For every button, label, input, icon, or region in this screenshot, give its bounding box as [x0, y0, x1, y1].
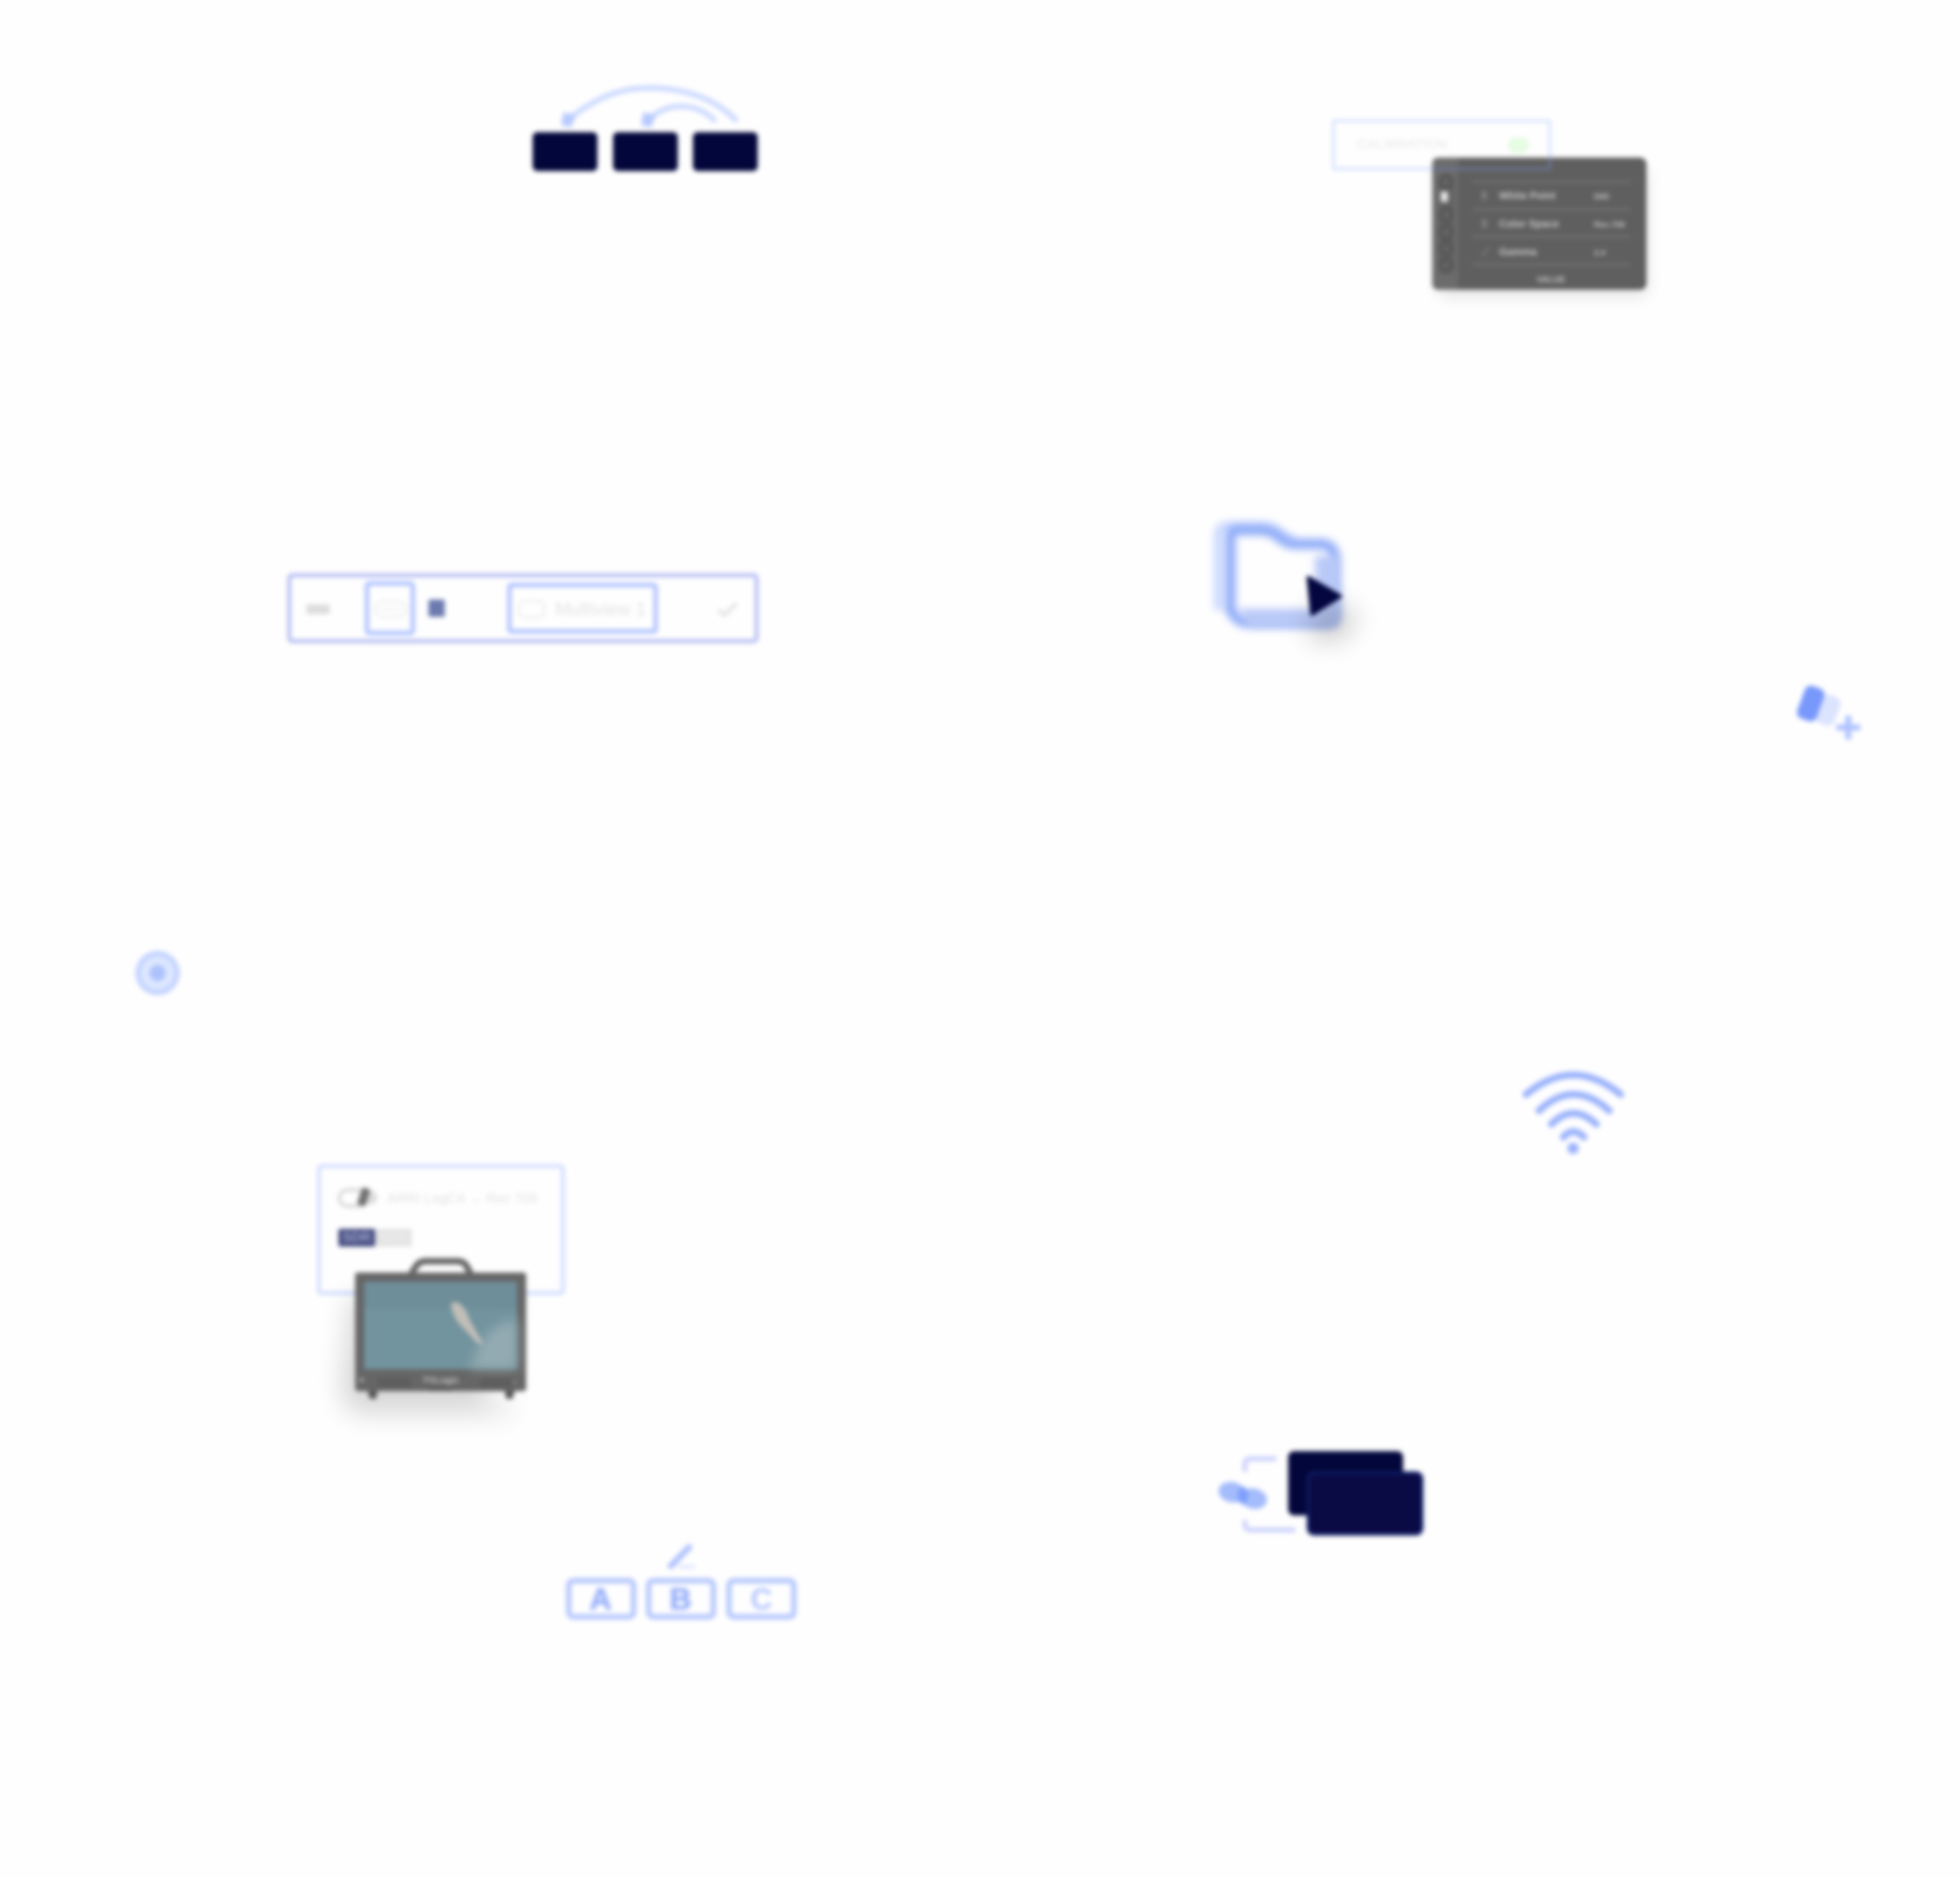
menu rows text: Rec.709 [1594, 220, 1625, 229]
toolbar frame [289, 575, 757, 641]
menu shadow [1438, 167, 1648, 297]
preset C [729, 1581, 794, 1617]
conversion label: ARRI LogC4 → Rec 709 [387, 1191, 537, 1206]
icon: folder with play [1219, 526, 1360, 642]
icon: A B C presets with pencil: A [590, 1582, 611, 1616]
bracket [1245, 1459, 1295, 1530]
boat [451, 1302, 484, 1345]
HDR button [375, 1229, 412, 1247]
play shadow [1306, 599, 1360, 642]
back screen [1288, 1451, 1403, 1515]
icon: three screens with cycling arrows [533, 88, 758, 171]
monitor screen [364, 1282, 517, 1369]
link icon [1217, 1479, 1269, 1512]
monitor handle [411, 1261, 471, 1274]
menu row icons [1481, 191, 1489, 257]
check mark [719, 603, 737, 615]
status pill [1508, 138, 1529, 153]
multiview box [509, 585, 656, 631]
folder outline [1230, 530, 1335, 622]
eraser light [1813, 692, 1843, 728]
menu rows text: D65 [1594, 192, 1609, 201]
folder bottom band [1238, 609, 1340, 628]
panel: multiview toolbar [289, 575, 757, 641]
highlighted pill box [367, 583, 413, 633]
arrow heads [561, 112, 656, 127]
menu sidebar [1432, 158, 1458, 290]
callout box [319, 1166, 563, 1293]
control buttons [378, 1378, 411, 1387]
icon: A B C presets with pencil [569, 1547, 794, 1617]
SDR button [338, 1229, 375, 1247]
monitor feet [368, 1390, 378, 1399]
plus [1836, 716, 1860, 739]
menu rows text: White Point [1499, 190, 1556, 202]
eraser solid [1795, 684, 1826, 723]
front screen [1308, 1473, 1422, 1534]
preset A [569, 1581, 634, 1617]
menu rows text: Gamma [1499, 247, 1537, 258]
panel: monitor with LUT callout: SDR [343, 1230, 371, 1245]
icon: target circle [138, 954, 177, 992]
arrow: long arc [569, 88, 736, 120]
menu rows text: 2.4 [1594, 248, 1606, 257]
calibration callout box [1333, 121, 1550, 169]
brand: TVLogic [423, 1375, 459, 1385]
callout box overlap [1432, 158, 1550, 169]
icon: linked stacked screens [1217, 1451, 1422, 1534]
menu rows text: Color Space [1499, 219, 1559, 230]
toggle [339, 1190, 365, 1206]
sea foam [469, 1319, 517, 1369]
menu row dividers [1472, 182, 1631, 264]
menu background [1432, 158, 1646, 290]
play triangle [1308, 577, 1340, 614]
monitor shadow [341, 1295, 513, 1414]
icon: wifi [1526, 1075, 1621, 1151]
blue swatch [428, 600, 445, 617]
icon: A B C presets with pencil: B [670, 1582, 691, 1616]
screens [533, 132, 758, 171]
menu rows text: VALUE [1536, 275, 1566, 284]
panel: calibration menu [1333, 121, 1648, 297]
panel: monitor with LUT callout: HDR [379, 1230, 407, 1245]
menu rows text [1499, 190, 1625, 284]
icon: A B C presets with pencil: C [751, 1582, 772, 1616]
panel: monitor with LUT callout [319, 1166, 563, 1414]
multiview label: Multiview 1 [555, 599, 646, 620]
preset B [649, 1581, 713, 1617]
icon: eraser plus [1795, 684, 1860, 739]
monitor body [355, 1273, 526, 1391]
calibration label: CALIBRATION [1357, 137, 1448, 152]
folder ghost [1219, 526, 1295, 610]
pencil [671, 1547, 689, 1566]
dash icon [307, 604, 330, 614]
